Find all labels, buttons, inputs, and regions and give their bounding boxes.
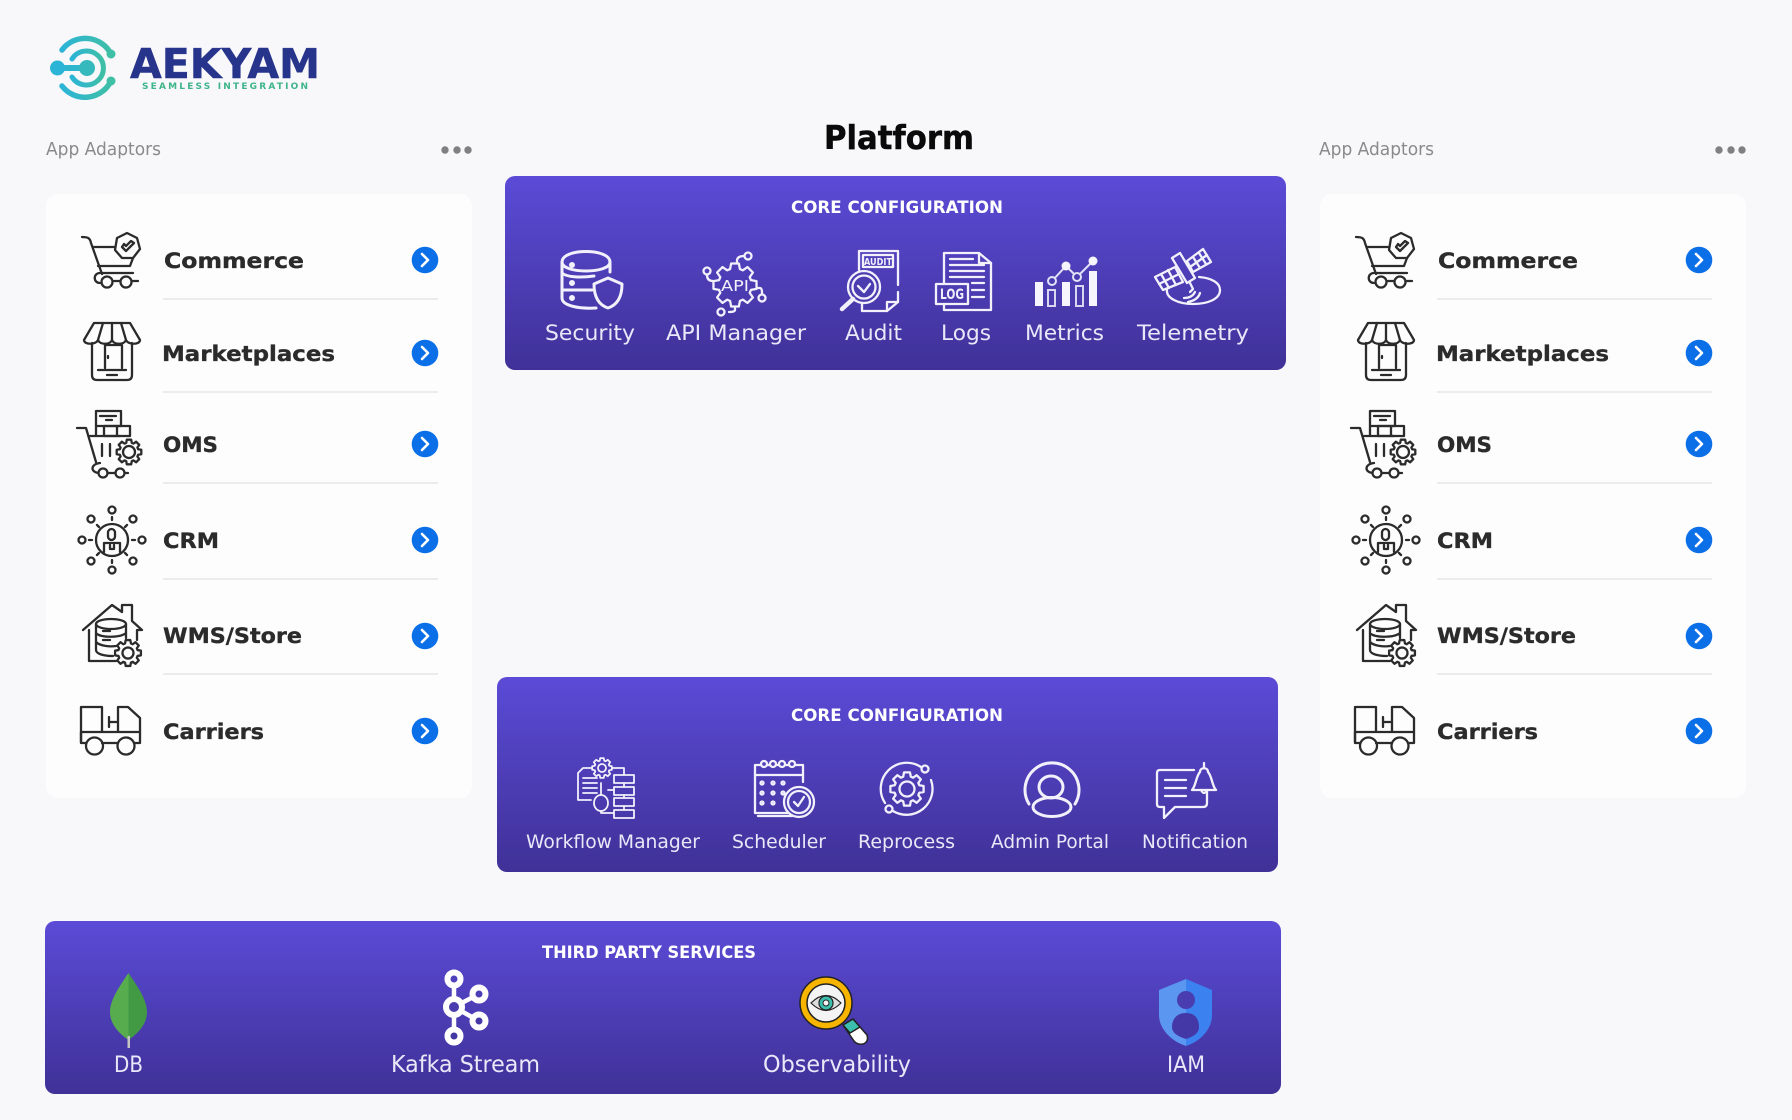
row: commerce xyxy=(82,233,438,288)
row: oms xyxy=(77,411,438,478)
item: notification xyxy=(1142,763,1248,853)
label: commerce: Commerce xyxy=(1438,249,1578,273)
row: wms/store xyxy=(1357,605,1712,666)
row: marketplaces xyxy=(84,323,438,380)
label: logs: Logs xyxy=(941,321,991,345)
icon: cart with badge xyxy=(1356,233,1414,288)
icon: magnifier with eye xyxy=(800,977,868,1044)
label: crm: CRM xyxy=(163,529,219,553)
arrow button xyxy=(1686,623,1712,649)
label: wms/store: WMS/Store xyxy=(1437,624,1576,648)
item: telemetry xyxy=(1136,249,1249,345)
arrow button xyxy=(1686,718,1712,744)
label: carriers: Carriers xyxy=(163,720,264,744)
logo emblem xyxy=(50,38,116,97)
arrow button xyxy=(1686,340,1712,366)
label: kafka stream: Kafka Stream xyxy=(391,1052,540,1078)
icon: green leaf xyxy=(110,973,147,1048)
label: crm: CRM xyxy=(1437,529,1493,553)
panel: core configuration top xyxy=(505,176,1286,370)
panel: left app adaptors xyxy=(46,194,472,798)
label: oms: OMS xyxy=(163,433,218,457)
label: metrics: Metrics xyxy=(1025,321,1104,345)
label: wms/store: WMS/Store xyxy=(163,624,302,648)
item: iam xyxy=(1159,979,1212,1078)
icon: crm network xyxy=(78,506,146,574)
arrow button xyxy=(412,623,438,649)
item: reprocess xyxy=(858,763,955,853)
row: crm xyxy=(78,506,438,574)
label: iam: IAM xyxy=(1167,1053,1205,1078)
row: crm xyxy=(1352,506,1712,574)
row: commerce xyxy=(1356,233,1712,288)
arrow button xyxy=(1686,431,1712,457)
icon: api gear xyxy=(704,252,766,316)
arrow button xyxy=(412,247,438,273)
row: oms xyxy=(1351,411,1712,478)
label: reprocess: Reprocess xyxy=(858,831,955,853)
item: metrics xyxy=(1025,256,1104,345)
row: carriers xyxy=(81,707,438,754)
logo xyxy=(50,38,320,97)
item: scheduler xyxy=(732,761,826,853)
row: marketplaces xyxy=(1358,323,1712,380)
arrow button xyxy=(1686,527,1712,553)
icon: workflow diagram xyxy=(578,758,634,818)
label: admin portal: Admin Portal xyxy=(991,831,1109,853)
arrow button xyxy=(412,718,438,744)
icon: api gear: API xyxy=(721,277,749,295)
icon: satellite and dish xyxy=(1155,249,1220,304)
panel: third party services xyxy=(45,921,1281,1094)
label: marketplaces: Marketplaces xyxy=(162,342,335,366)
arrow button xyxy=(412,527,438,553)
item: db xyxy=(110,973,147,1078)
item: observability xyxy=(763,977,911,1078)
label: marketplaces: Marketplaces xyxy=(1436,342,1609,366)
icon: calendar and clock xyxy=(755,761,814,817)
label: notification: Notification xyxy=(1142,831,1248,853)
item: workflow manager xyxy=(526,758,700,853)
arrow button xyxy=(412,431,438,457)
icon: database with shield xyxy=(562,252,622,308)
title: platform: Platform xyxy=(824,118,974,157)
panel heading: CORE CONFIGURATION xyxy=(791,198,1003,218)
label: scheduler: Scheduler xyxy=(732,831,826,853)
icon: blue shield xyxy=(1159,979,1212,1046)
icon: warehouse with database xyxy=(1357,605,1416,666)
row: carriers xyxy=(1355,707,1712,754)
icon: admin user xyxy=(1025,763,1079,816)
item: audit xyxy=(842,251,902,345)
icon: cart with boxes and gear xyxy=(77,411,141,478)
icon: log document: LOG xyxy=(940,287,964,303)
label: db: DB xyxy=(114,1053,143,1078)
label: oms: OMS xyxy=(1437,433,1492,457)
arrow button xyxy=(412,340,438,366)
label: carriers: Carriers xyxy=(1437,720,1538,744)
row: wms/store xyxy=(83,605,438,666)
icon: gear in orbit xyxy=(881,763,933,815)
label: commerce: Commerce xyxy=(164,249,304,273)
panel heading: THIRD PARTY SERVICES xyxy=(542,943,756,963)
label: audit: Audit xyxy=(845,321,902,345)
label: telemetry: Telemetry xyxy=(1136,321,1249,345)
panel: right app adaptors xyxy=(1320,194,1746,798)
icon: delivery truck xyxy=(81,707,140,754)
icon: cart with boxes and gear xyxy=(1351,411,1415,478)
logo wordmark: AEKYAM xyxy=(130,40,320,88)
icon: delivery truck xyxy=(1355,707,1414,754)
panel: core configuration lower xyxy=(497,677,1278,872)
item: kafka stream xyxy=(391,972,540,1078)
icon: storefront xyxy=(84,323,140,380)
item: admin portal xyxy=(991,763,1109,853)
logo tagline: SEAMLESS INTEGRATION xyxy=(142,82,308,92)
item: security xyxy=(545,252,635,345)
icon: bar and line chart xyxy=(1035,256,1098,306)
panel heading: CORE CONFIGURATION xyxy=(791,706,1003,726)
label: workflow manager: Workflow Manager xyxy=(526,831,700,853)
item: logs xyxy=(936,253,991,345)
right menu dots xyxy=(1715,146,1746,154)
left menu dots xyxy=(441,146,472,154)
icon: cart with badge xyxy=(82,233,140,288)
label: security: Security xyxy=(545,321,635,345)
icon: kafka nodes xyxy=(446,972,486,1042)
arrow button xyxy=(1686,247,1712,273)
heading: right app adaptors: App Adaptors xyxy=(1319,139,1434,160)
item: api manager xyxy=(666,252,806,345)
icon: audit document and magnifier: AUDIT xyxy=(864,257,892,268)
icon: warehouse with database xyxy=(83,605,142,666)
heading: left app adaptors: App Adaptors xyxy=(46,139,161,160)
label: observability: Observability xyxy=(763,1052,911,1078)
icon: chat bubble and bell xyxy=(1157,763,1216,818)
icon: storefront xyxy=(1358,323,1414,380)
label: api manager: API Manager xyxy=(666,321,806,345)
icon: crm network xyxy=(1352,506,1420,574)
